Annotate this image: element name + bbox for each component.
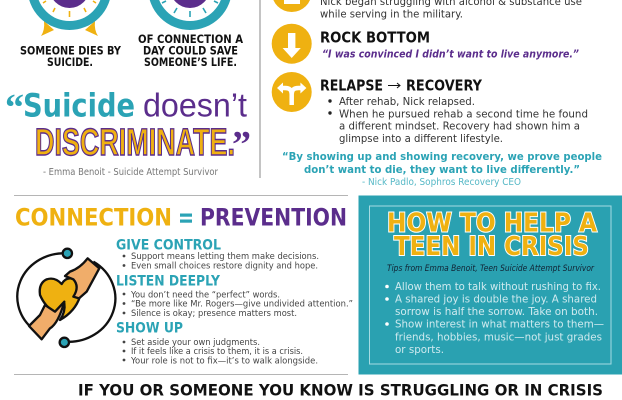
section: listen deeply: You don’t need the “perfect” words. <box>130 290 280 300</box>
heading: relapse to recovery <box>320 77 483 95</box>
heading: relapse to recovery: RELAPSE <box>320 77 383 95</box>
text: tips bullets <box>385 280 604 356</box>
icon: alarm clock yellow <box>32 0 107 36</box>
section: show up <box>116 321 318 366</box>
callout: suicide doesn't discriminate quote: - Emma Benoit - Suicide Attempt Survivor <box>43 167 218 178</box>
heading: how to help a teen in crisis <box>387 209 597 262</box>
section: give control: GIVE CONTROL <box>116 237 221 253</box>
text: of connection a day: OF CONNECTION A <box>138 32 244 46</box>
panel: connection equals prevention <box>15 204 353 366</box>
text: relapse bullets <box>328 95 588 145</box>
callout: suicide doesn't discriminate quote: ” <box>232 124 251 166</box>
icon: hands holding heart <box>17 249 115 347</box>
text: relapse bullets: glimpse into a different lifestyle. <box>339 132 503 145</box>
text: tips bullets: Show interest in what matters to them— <box>395 318 604 331</box>
section: show up: Set aside your own judgments. <box>131 338 260 348</box>
text: rock bottom quote: “I was convinced I didn’t want to live anymore.” <box>322 50 579 60</box>
heading: connection = prevention <box>15 204 347 232</box>
callout: suicide doesn't discriminate quote <box>5 86 251 178</box>
section: show up: SHOW UP <box>116 321 183 337</box>
icon: forking arrow <box>272 72 312 112</box>
text: struggling intro <box>320 0 582 20</box>
callout: Nick Padlo quote: “By showing up and showing recovery, we prove people <box>282 150 602 163</box>
text: tips bullets: sorrow is half the sorrow. Take on both. <box>395 305 598 318</box>
text: tips bullets: A shared joy is double the joy. A shared <box>395 293 597 306</box>
heading: crisis banner: IF YOU OR SOMEONE YOU KNOW IS STRUGGLING OR IN CRISIS <box>78 381 603 400</box>
heading: how to help a teen in crisis: HOW TO HELP A <box>387 209 597 239</box>
text: of connection a day: DAY COULD SAVE <box>143 44 238 58</box>
text: tips source: Tips from Emma Benoit, Teen Suicide Attempt Survivor <box>387 264 594 274</box>
section: listen deeply: Silence is okay; presence matters most. <box>131 309 297 319</box>
panel: Nick's story <box>272 0 602 188</box>
heading: how to help a teen in crisis: TEEN IN CRISIS <box>394 232 589 262</box>
text: relapse bullets: After rehab, Nick relapsed. <box>339 95 475 108</box>
heading: connection = prevention: CONNECTION <box>15 204 172 232</box>
text: tips bullets: friends, hobbies, music—not just grades <box>395 331 602 344</box>
text: tips bullets: Allow them to talk without rushing to fix. <box>395 280 601 293</box>
callout: Nick Padlo quote: - Nick Padlo, Sophros Recovery CEO <box>362 177 521 188</box>
panel: statistics clocks <box>20 0 244 69</box>
section: listen deeply: LISTEN DEEPLY <box>116 274 221 290</box>
heading: relapse to recovery: RECOVERY <box>406 77 483 95</box>
icon: down arrow <box>272 24 312 64</box>
panel: how to help a teen in crisis <box>358 196 622 374</box>
section: give control: Support means letting them make decisions. <box>131 252 319 262</box>
text: someone dies by suicide <box>20 44 121 69</box>
text: struggling intro: while serving in the military. <box>320 8 463 20</box>
icon: circle with white shape <box>272 0 312 12</box>
text: someone dies by suicide: SUICIDE. <box>47 55 93 69</box>
icon: alarm clock teal <box>152 0 228 26</box>
section: listen deeply <box>116 274 353 319</box>
text: tips bullets: or sports. <box>395 343 444 356</box>
text: someone dies by suicide: SOMEONE DIES BY <box>20 44 121 58</box>
section: show up: If it feels like a crisis to them, it is a crisis. <box>131 347 303 357</box>
heading: rock bottom: ROCK BOTTOM <box>320 28 430 46</box>
callout: Nick Padlo quote <box>282 150 602 188</box>
section: give control <box>116 237 319 272</box>
callout: suicide doesn't discriminate quote: Suicide <box>23 86 135 124</box>
heading: connection = prevention: PREVENTION <box>200 204 347 232</box>
section: show up: Your role is not to fix—it’s to walk alongside. <box>130 356 318 366</box>
section: listen deeply: “Be more like Mr. Rogers—give undivided attention.” <box>131 300 353 310</box>
callout: suicide doesn't discriminate quote: DISCRIMINATE. <box>35 122 235 164</box>
text: relapse bullets: When he pursued rehab a second time he found <box>339 107 588 120</box>
text: of connection a day: SOMEONE’S LIFE. <box>144 55 237 69</box>
callout: Nick Padlo quote: don’t want to die, they want to live differently.” <box>304 163 580 176</box>
text: of connection a day <box>138 32 244 69</box>
callout: suicide doesn't discriminate quote: doesn’t <box>143 86 247 124</box>
section: give control: Even small choices restore dignity and hope. <box>131 262 318 272</box>
text: relapse bullets: a different mindset. Recovery had shown him a <box>339 120 580 133</box>
callout: suicide doesn't discriminate quote: “ <box>5 87 24 129</box>
